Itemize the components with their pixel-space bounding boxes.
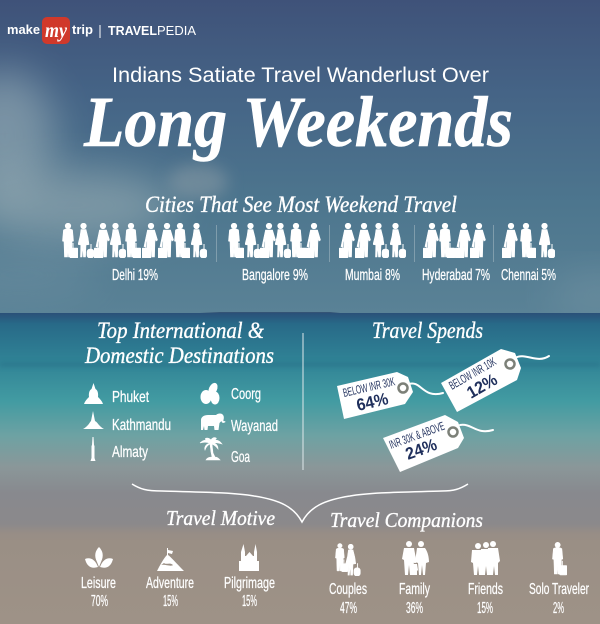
label: leisure [81,575,116,610]
label: couples [329,581,367,617]
heading: destinations: Domestic Destinations [84,343,274,368]
label: family: 36% [406,600,423,617]
label: Kathmandu: Kathmandu [112,417,171,434]
label: Almaty: Almaty [112,444,148,461]
label: leisure: 70% [91,593,108,610]
heading: travel companions: Travel Companions [330,508,483,532]
label: solo traveler [529,581,589,617]
logo [7,17,197,44]
chart: Delhi travellers [62,223,207,258]
icon: couples [335,543,360,576]
icon: adventure mountain [157,548,184,571]
chart: Mumbai travellers [339,223,406,258]
label: solo traveler: 2% [553,600,564,617]
sky background [0,0,600,314]
tag: below 30K: 64% [355,389,390,415]
icon: Almaty tower [90,437,96,461]
label: friends: 15% [477,600,493,617]
logo: TRAVEL [108,24,157,38]
label: couples: Couples [329,581,367,598]
sea background [0,313,600,533]
icon: Wayanad elephant [201,414,226,430]
label: adventure: 15% [163,593,178,610]
label: Phuket: Phuket [112,389,149,406]
chart: Chennai travellers [502,223,555,258]
logo: my [45,20,67,42]
dark wave band [0,362,600,367]
heading: travel spends: Travel Spends [372,318,483,343]
label: family: Family [399,581,430,598]
label: pilgrimage: Pilgrimage [224,575,275,592]
label: pilgrimage: 15% [242,593,257,610]
chart: Bangalore travellers [228,223,320,258]
tag: below 30K [337,372,443,419]
heading: destinations [84,318,274,368]
label: Chennai: Chennai 5% [501,267,556,284]
label: leisure: Leisure [81,575,116,592]
sand background [0,533,600,624]
tag: 30K and above: INR 30K & ABOVE [387,419,447,452]
tag: 30K and above [383,415,493,472]
label: couples: 47% [340,600,357,617]
label: Goa: Goa [231,449,250,466]
label: pilgrimage [224,575,275,610]
brace connector [132,484,468,522]
label: Delhi: Delhi 19% [112,267,158,284]
heading: cities: Cities That See Most Weekend Travel [145,192,457,217]
label: Mumbai: Mumbai 8% [345,267,400,284]
icon: Goa palm tree [200,438,222,460]
chart: Hyderabad travellers [423,223,486,258]
label: Coorg: Coorg [231,386,261,403]
label: adventure [146,575,194,610]
logo: trip [72,23,93,37]
icon: leisure lotus [85,547,113,568]
tag: below 10K [441,349,549,412]
label: family [399,581,430,617]
tag: below 10K: BELOW INR 10K [446,354,499,393]
label: Bangalore: Bangalore 9% [242,267,308,284]
icon: solo traveler [552,542,567,575]
label: friends: Friends [468,581,503,598]
clouds [0,70,600,317]
tag: 30K and above: 24% [403,435,439,464]
divider [302,333,304,470]
title line: Indians Satiate Travel Wanderlust Over [112,63,489,87]
label: adventure: Adventure [146,575,194,592]
tag: below 10K: 12% [464,370,501,402]
icon: friends [471,541,500,575]
label: Wayanad: Wayanad [231,418,278,435]
title: Long Weekends: Long Weekends [83,82,513,162]
heading: destinations: Top International & [97,318,264,343]
icon: Kathmandu stupa [83,411,104,429]
logo: make [7,23,40,37]
heading: travel motive: Travel Motive [166,506,275,530]
icon: Phuket buddha [84,383,103,404]
label: friends [468,581,503,617]
icon: pilgrimage church [239,544,259,571]
icon: Coorg coffee beans [200,381,220,404]
distant island [150,312,350,314]
logo: PEDIA [157,24,197,38]
icon: family [402,541,429,575]
label: Hyderabad: Hyderabad 7% [422,267,490,284]
tag: below 30K: BELOW INR 30K [342,374,396,400]
